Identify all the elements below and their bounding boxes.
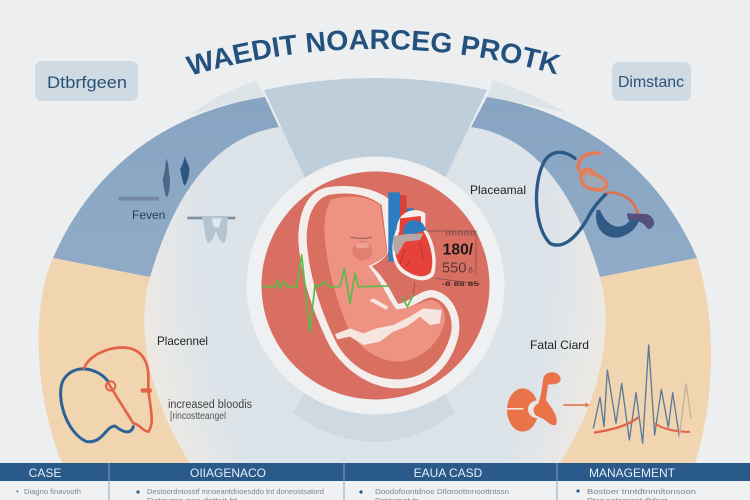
arrow [563,402,590,408]
column: diagnosis: OIIAGENACO [190,466,266,480]
heart rate ECG trace [263,255,390,332]
vital readout: 88888 [445,231,476,237]
icon: feven bars [118,156,190,201]
diagram backdrop: inner disc [144,127,606,463]
chart: fetal heart trace [593,345,691,443]
label box: right: Dimstanc [618,74,684,91]
text: feven: Feven [132,208,165,222]
column: fetal case: Doodofoontdnoo DIloroottnnoottntssn [375,487,509,496]
vital readout: -8 88 85 [442,281,480,288]
column: case [16,466,81,496]
vital readout [413,231,480,295]
pale wedge: top left [190,81,265,115]
column: management: Bostoer tnntdtnnnltonsoon [587,487,696,496]
text: placennel: Placennel [157,334,208,348]
vital readout: 180/ [443,242,474,259]
title: WAEDIT NOARCEG PROTK [185,30,561,74]
column: fetal case: EAUA CASD [414,466,483,480]
text: increased blood [168,399,252,422]
panel: bottom sector [293,390,455,442]
label box: left: Dtbrfgeen [47,73,127,92]
panel: lower right peach band [560,258,711,463]
label box: left [35,61,138,101]
text: increased blood: [rincostteangel [170,411,226,422]
panel: lower left peach band [39,258,190,463]
table: bottom strip [0,463,750,500]
column: case: • [16,487,19,496]
column: management [576,466,696,500]
central medallion [246,156,504,414]
panel: upper left blue band [53,97,279,277]
white tissue streaks [335,308,442,345]
column: fetal case [359,466,509,500]
column: management: MANAGEMENT [589,466,676,480]
column: diagnosis [136,466,324,500]
column: case: Diagno finavooth [24,487,81,496]
vital readout: ß [468,266,473,275]
fetus face [351,237,372,261]
vital readout: 550 [442,261,466,277]
icon: stethoscope [537,152,654,245]
icon: tooth shape [187,216,235,243]
label box: right [612,62,691,101]
column: diagnosis: Destoordntosstf mnoeantdnoesddo tnt doneostsatord [147,487,324,496]
panel: top sector [264,78,487,178]
icon: blood vessel loop [61,348,152,442]
column: case: CASE [29,466,61,480]
heart [388,192,436,280]
text: increased blood: increased bloodis [168,399,252,411]
text: fatal card: Fatal Ciard [530,338,589,352]
fetus illustration [263,186,480,388]
text: placeamal: Placeamal [470,183,526,197]
panel: upper right blue band [471,97,697,277]
pale wedge: top right [487,80,567,113]
icon: orange heart symbol [507,372,561,432]
